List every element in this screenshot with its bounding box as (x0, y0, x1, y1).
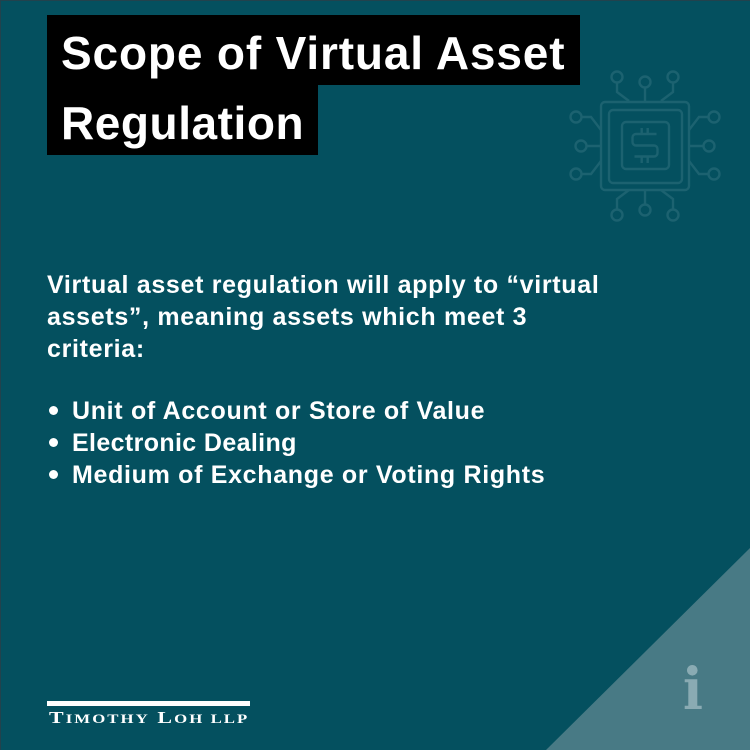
bullet 2: Electronic Dealing (72, 429, 297, 457)
intro text (47, 271, 599, 363)
intro text: assets”, meaning assets which meet 3 (47, 303, 527, 331)
logo: Timothy Loh LLP: TIMOTHY LOH LLP (49, 708, 249, 727)
title line 2 (47, 85, 318, 155)
icon: info letter i (684, 665, 702, 709)
bullet 1: Unit of Account or Store of Value (72, 397, 485, 425)
intro text: Virtual asset regulation will apply to “virtual (47, 271, 599, 299)
bullet list of criteria (49, 397, 545, 489)
title line 1: Scope of Virtual Asset (61, 27, 565, 79)
intro text: criteria: (47, 335, 145, 363)
bullet 3: Medium of Exchange or Voting Rights (72, 461, 545, 489)
title line 2: Regulation (61, 97, 304, 149)
